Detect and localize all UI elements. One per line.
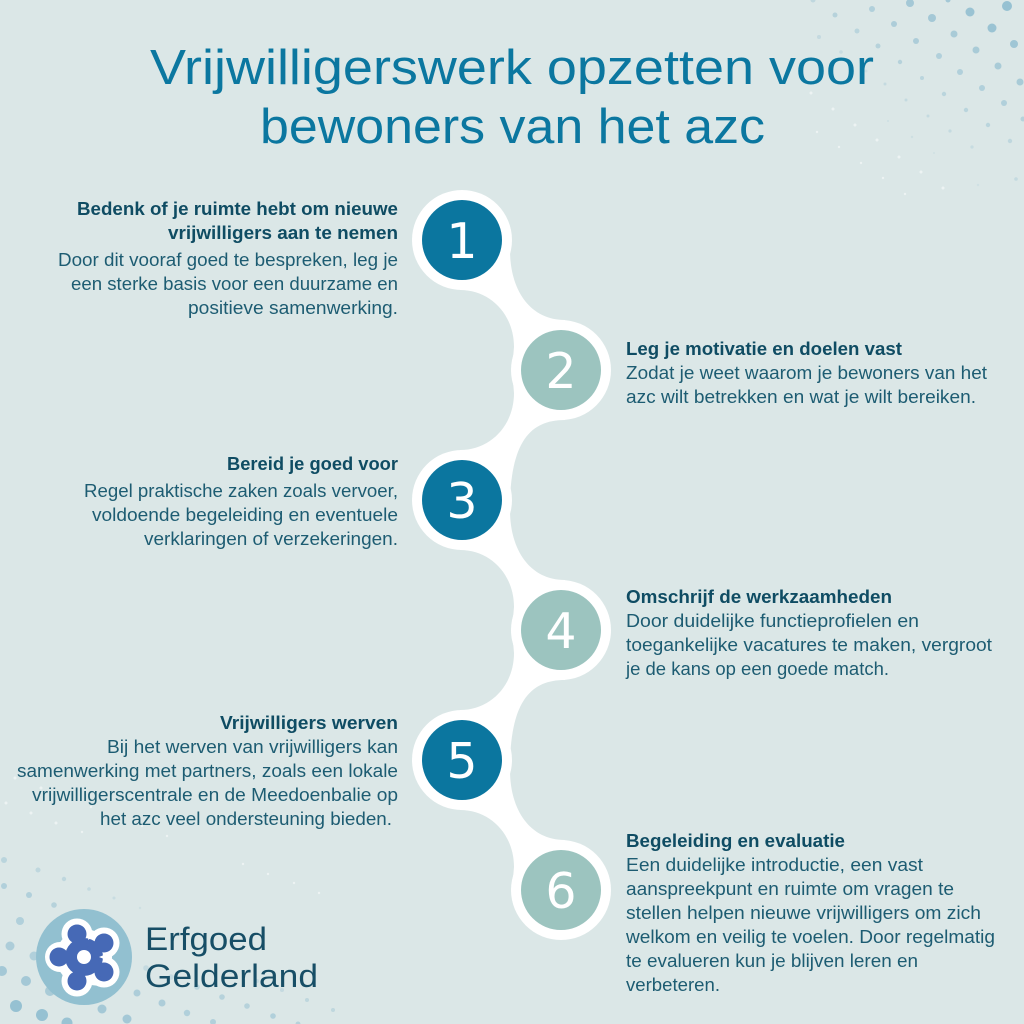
title: Vrijwilligerswerk opzetten voor bbox=[150, 41, 874, 95]
step 1 description: positieve samenwerking. bbox=[188, 298, 398, 318]
step 1 number badge: 1 bbox=[446, 213, 478, 270]
step 2 number badge: 2 bbox=[545, 343, 577, 400]
step 2 description: Zodat je weet waarom je bewoners van het bbox=[626, 363, 987, 383]
step 4 number badge bbox=[521, 590, 601, 670]
step 1 number badge bbox=[422, 200, 502, 280]
step 5 description bbox=[17, 737, 398, 829]
title bbox=[150, 41, 874, 154]
step 3 heading: Bereid je goed voor bbox=[227, 454, 398, 474]
step 4 description: Door duidelijke functieprofielen en bbox=[626, 611, 919, 631]
step 1 heading bbox=[77, 199, 398, 243]
step 4 description: je de kans op een goede match. bbox=[625, 659, 889, 679]
step 5 number badge bbox=[422, 720, 502, 800]
step 6 bbox=[521, 831, 995, 995]
step 4 heading: Omschrijf de werkzaamheden bbox=[626, 587, 892, 607]
step 1 heading: vrijwilligers aan te nemen bbox=[168, 223, 398, 243]
logo: Erfgoed Gelderland bbox=[36, 909, 318, 1005]
step 2 description bbox=[626, 363, 987, 407]
step 3 number badge bbox=[422, 460, 502, 540]
step 6 description: stellen helpen nieuwe vrijwilligers om zich bbox=[626, 903, 981, 923]
step 5 description: Bij het werven van vrijwilligers kan bbox=[107, 737, 398, 757]
step 1 description: een sterke basis voor een duurzame en bbox=[71, 274, 398, 294]
logo wordmark: Erfgoed bbox=[145, 921, 267, 957]
step 5 description: samenwerking met partners, zoals een lokale bbox=[17, 761, 398, 781]
logo wordmark bbox=[145, 921, 318, 994]
connector: white winding path bbox=[412, 190, 611, 940]
step 4 description bbox=[625, 611, 992, 679]
step 1 heading: Bedenk of je ruimte hebt om nieuwe bbox=[77, 199, 398, 219]
dots: faint white speckles bbox=[4, 92, 944, 894]
title: bewoners van het azc bbox=[260, 100, 765, 154]
step 4 number badge: 4 bbox=[545, 603, 577, 660]
step 1 description: Door dit vooraf goed te bespreken, leg je bbox=[58, 250, 398, 270]
dots: top right decoration bbox=[810, 0, 1024, 186]
step 2 heading: Leg je motivatie en doelen vast bbox=[626, 339, 902, 359]
step 6 description: te evalueren kun je blijven leren en bbox=[626, 951, 918, 971]
step 6 number badge bbox=[521, 850, 601, 930]
step 5 bbox=[17, 713, 502, 829]
step 3 bbox=[84, 454, 502, 549]
step 5 description: het azc veel ondersteuning bieden. bbox=[100, 809, 392, 829]
step 6 description bbox=[625, 855, 995, 995]
dots: bottom left decoration bbox=[0, 857, 335, 1024]
icon: flower in ring bbox=[36, 909, 132, 1005]
step 3 description bbox=[84, 481, 398, 549]
step 3 description: Regel praktische zaken zoals vervoer, bbox=[84, 481, 398, 501]
step 6 description: aanspreekpunt en ruimte om vragen te bbox=[626, 879, 954, 899]
logo wordmark: Gelderland bbox=[145, 958, 318, 994]
step 6 description: verbeteren. bbox=[626, 975, 720, 995]
step 6 description: Een duidelijke introductie, een vast bbox=[626, 855, 923, 875]
step 4 bbox=[521, 587, 992, 679]
step 2 bbox=[521, 330, 987, 410]
step 6 description: welkom en veilig te voelen. Door regelmatig bbox=[625, 927, 995, 947]
step 2 number badge bbox=[521, 330, 601, 410]
step 6 number badge: 6 bbox=[545, 863, 577, 920]
step 5 description: vrijwilligerscentrale en de Meedoenbalie op bbox=[32, 785, 398, 805]
step 3 description: verklaringen of verzekeringen. bbox=[144, 529, 398, 549]
step 4 description: toegankelijke vacatures te maken, vergroot bbox=[626, 635, 992, 655]
step 6 heading: Begeleiding en evaluatie bbox=[626, 831, 845, 851]
step 3 description: voldoende begeleiding en eventuele bbox=[92, 505, 398, 525]
step 3 number badge: 3 bbox=[446, 473, 478, 530]
step 1 description bbox=[58, 250, 398, 318]
step 2 description: azc wilt betrekken en wat je wilt bereiken. bbox=[626, 387, 976, 407]
step 5 number badge: 5 bbox=[446, 733, 478, 790]
step 5 heading: Vrijwilligers werven bbox=[220, 713, 398, 733]
step 1 bbox=[58, 199, 502, 318]
